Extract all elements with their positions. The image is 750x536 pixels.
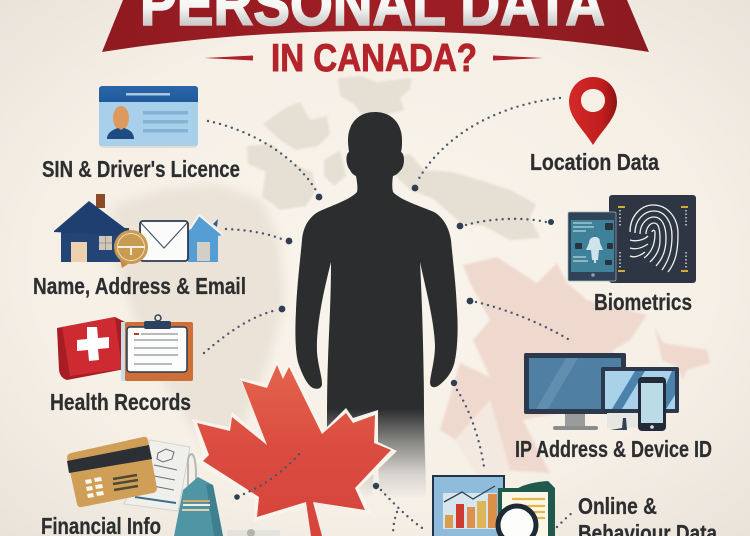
label: location data: Location Data: [530, 149, 659, 175]
label: biometrics: Biometrics: [594, 289, 692, 315]
dotted connectors: [204, 98, 573, 536]
silhouette person: [295, 112, 458, 500]
maple leaf: [192, 360, 397, 536]
label: name address email: Name, Address & Email: [33, 273, 246, 299]
icon: credit card, receipt and shopping bag: [67, 437, 223, 536]
label: health records: Health Records: [50, 389, 191, 415]
icon: analytics chart, folder and magnifier: [433, 476, 555, 536]
label: online and behaviour data: [578, 493, 717, 536]
subtitle: In Canada?: IN CANADA?: [271, 37, 477, 80]
label: SIN and licence: SIN & Driver's Licence: [42, 156, 240, 182]
icon: location pin: [569, 77, 617, 145]
icon: tablet and fingerprint scanner: [568, 195, 696, 283]
icon: grey object at bottom: [227, 529, 280, 536]
icon: ID card: [99, 86, 198, 148]
icon: monitors and phone: [524, 353, 679, 431]
label: online and behaviour data: Online &: [578, 493, 657, 519]
icon: health book and clipboard: [57, 315, 193, 381]
faint map of Canada: [113, 76, 710, 480]
icon: house, coin and envelope: [54, 194, 223, 268]
banner: [102, 0, 649, 52]
